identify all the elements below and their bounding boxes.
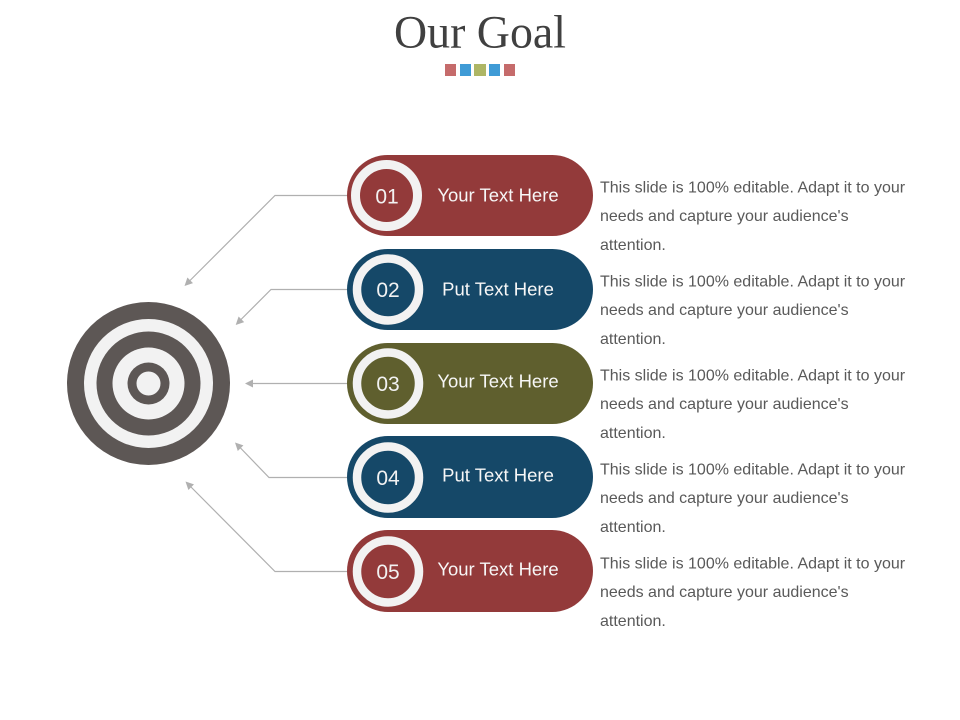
description 04: needs and capture your audience's — [600, 490, 849, 507]
description 01: needs and capture your audience's — [600, 208, 849, 225]
description 03: needs and capture your audience's — [600, 396, 849, 413]
description 01: This slide is 100% editable. Adapt it to your — [600, 180, 906, 196]
pill 03: 03 — [376, 373, 400, 396]
arrow 4 — [235, 442, 347, 478]
pill 02 — [347, 249, 593, 330]
pill 02: 02 — [376, 279, 400, 302]
pill 01: Your Text Here — [437, 184, 559, 206]
pill 04: 04 — [376, 467, 400, 490]
icon: target — [67, 302, 230, 465]
pill 03: Your Text Here — [437, 370, 559, 392]
pill 05: Your Text Here — [437, 558, 559, 580]
description 02: This slide is 100% editable. Adapt it to your — [600, 274, 906, 290]
pill 05 — [347, 530, 593, 612]
description 05: This slide is 100% editable. Adapt it to your — [600, 556, 906, 572]
arrow 5 — [186, 482, 347, 572]
arrow 2 — [236, 290, 347, 325]
description 01: attention. — [600, 237, 666, 254]
pill 03 — [347, 343, 593, 424]
title accent squares — [445, 64, 515, 76]
description 04: attention. — [600, 519, 666, 536]
description 02: attention. — [600, 331, 666, 348]
description 02: needs and capture your audience's — [600, 302, 849, 319]
pill 04: Put Text Here — [442, 464, 554, 486]
pill 01: 01 — [375, 186, 399, 208]
description 05: needs and capture your audience's — [600, 584, 849, 601]
title: Our Goal — [394, 6, 566, 58]
arrow 1 — [184, 196, 347, 286]
description 05: attention. — [600, 613, 666, 630]
arrow 3 — [245, 380, 347, 388]
description 04: This slide is 100% editable. Adapt it to your — [600, 462, 906, 478]
pill 04 — [347, 436, 593, 518]
description 03: attention. — [600, 425, 666, 442]
pill 01 — [347, 155, 593, 236]
pill 05: 05 — [376, 561, 400, 584]
description 03: This slide is 100% editable. Adapt it to your — [600, 368, 906, 384]
pill 02: Put Text Here — [442, 278, 554, 300]
